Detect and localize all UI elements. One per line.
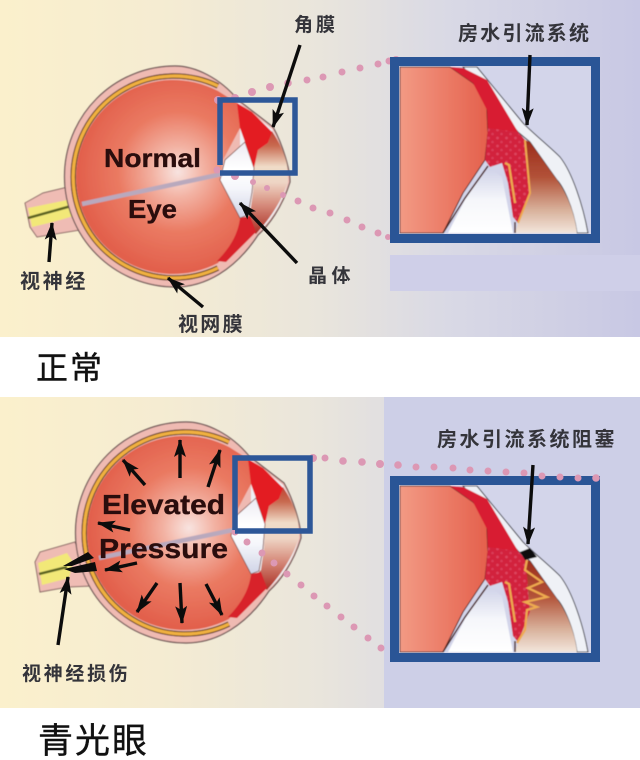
label: blocked drainage: 房水引流系统阻塞 [437,427,617,451]
zoom box: glaucoma [235,458,310,531]
label: lens: 晶体 [308,265,355,287]
cornea band [463,486,588,652]
panel: normal eye background [0,0,640,337]
trabecular meshwork [485,128,530,223]
cornea band [463,67,588,233]
dotted line: upper zoom connector, normal eye [214,56,400,104]
arrow: blocked drainage [528,465,533,544]
normal eye diagram [25,66,290,287]
zoom box: normal eye [220,100,295,173]
inner outlines [443,585,515,652]
heading: normal: 正常 [36,350,104,386]
inset frame: normal [394,62,596,238]
text: Normal: Normal [104,143,201,173]
label: retina: 视网膜 [178,313,245,336]
dotted line: lower zoom connector, normal eye [214,166,398,242]
label: drainage system: 房水引流系统 [458,21,591,45]
heading: glaucoma: 青光眼 [38,722,149,760]
text: Eye: Eye [128,194,177,224]
label: optic nerve: 视神经 [20,270,88,293]
yellow tissue edges [505,163,515,203]
eyeball [76,422,301,643]
lens [448,168,513,233]
arrow: retina [168,278,203,307]
dotted line: upper connector over glaucoma inset frame [538,472,600,482]
trabecular meshwork [485,547,530,642]
blocked tissue zigzag [505,560,547,643]
optic nerve damage wedges [63,552,97,573]
damaged optic nerve [35,542,91,592]
label: cornea: 角膜 [294,13,338,36]
red scleral band [450,486,528,584]
dotted line: lower zoom connector, glaucoma [232,528,399,662]
panel: glaucoma background [0,397,640,708]
blockage [520,548,537,560]
panel: lavender area behind glaucoma inset [384,397,640,708]
optic nerve [25,186,84,237]
red scleral band [450,67,528,165]
vitreous [400,486,488,652]
panel: lavender band below normal inset [390,255,640,291]
anterior chamber [515,559,577,652]
arrow: lens [240,203,297,263]
dotted line: upper zoom connector, glaucoma [309,454,528,476]
arrow: cornea [273,45,300,127]
inset background [397,64,594,237]
inset: blocked drainage detail [397,483,594,656]
arrow: optic nerve [49,223,52,262]
text: Elevated: Elevated [102,489,225,520]
glaucoma eye diagram [35,422,301,643]
anterior chamber [515,140,577,233]
vitreous [400,67,488,233]
inset frame: glaucoma [394,480,596,658]
label: optic nerve damage: 视神经损伤 [22,663,131,685]
inset background [397,483,594,656]
lens [448,587,513,652]
inset: normal drainage detail [397,64,594,237]
inner outlines [443,166,515,233]
eyeball [64,66,290,287]
pressure arrows [98,440,222,623]
arrow: drainage system [527,55,530,125]
arrow: optic nerve damage [58,577,68,645]
text: Pressure: Pressure [99,533,228,564]
